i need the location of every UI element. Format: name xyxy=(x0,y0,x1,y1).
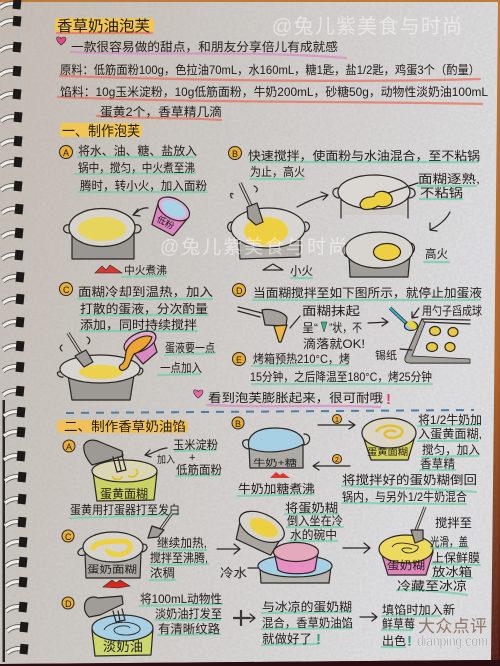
closing note with heart xyxy=(194,390,391,408)
badge E xyxy=(232,352,246,366)
egg note: 一点加入 xyxy=(160,361,202,375)
batter note: ”状，不 xyxy=(329,321,362,335)
top watermark: @兔儿紫美食与时尚 xyxy=(272,15,462,38)
final note xyxy=(382,602,455,650)
added ingredients xyxy=(145,438,222,477)
spoon note: 用勺子舀成球 xyxy=(422,304,482,318)
step C text: 打散的蛋液，分次酌量 xyxy=(80,301,208,316)
cold water label: 冷水 xyxy=(220,566,247,580)
cream bowl: 淡奶油 xyxy=(103,639,143,654)
ingredients: filling xyxy=(58,84,488,104)
milk caption: 牛奶加糖煮沸 xyxy=(238,481,315,496)
batter note: 面糊逐熟, xyxy=(418,171,480,186)
pot with batter xyxy=(64,208,141,259)
panel: filling step B xyxy=(232,412,482,504)
cold bowl note: 水的碗中 xyxy=(290,527,337,542)
spatula with drip xyxy=(238,307,287,342)
right notes: 香草精 xyxy=(420,457,455,471)
heading: section two: 二、制作香草奶油馅 xyxy=(64,419,186,434)
milk pot xyxy=(243,428,310,468)
low flame xyxy=(263,264,283,270)
arrow to pot xyxy=(133,208,148,216)
custard spatula xyxy=(411,507,425,543)
badge E: E xyxy=(236,355,242,365)
title: 香草奶油泡芙 xyxy=(57,18,150,35)
combine note: 与冰凉的蛋奶糊 xyxy=(262,599,352,614)
flame xyxy=(270,472,290,478)
right notes: 入蛋黄面糊, xyxy=(418,426,482,441)
badge D: D xyxy=(236,286,243,296)
added ingredients: + xyxy=(189,452,195,464)
panel: filling step C xyxy=(62,513,265,588)
panel: step D choux xyxy=(232,284,482,363)
chill note: 冷藏至冰凉 xyxy=(397,578,467,593)
arrow to tray xyxy=(368,318,388,326)
arrow to second pot xyxy=(297,192,328,207)
ingredients: choux: 原料：低筋面粉100g，色拉油70mL，水160mL，糖1匙，盐1/2匙，鸡蛋3个（酌量） xyxy=(60,62,480,77)
pot: batter forming xyxy=(333,175,415,218)
chill note: 放冰箱 xyxy=(432,564,472,579)
batter note: 不粘锅 xyxy=(420,185,463,200)
badge C xyxy=(60,282,72,296)
step A text: 腾时，转小火，加入面粉 xyxy=(80,178,207,193)
final note: ! xyxy=(407,633,412,650)
return note xyxy=(342,472,477,504)
badge C: C xyxy=(65,532,72,542)
egg note xyxy=(158,340,215,375)
batter note xyxy=(388,171,480,200)
arrow to cold water bowl xyxy=(217,544,240,554)
custard pot: 蛋奶面糊 xyxy=(87,563,137,576)
dianping watermark: 大众点评 xyxy=(418,617,487,636)
batter note: 面糊抹起 xyxy=(302,303,360,318)
egg note: 蛋液要一点 xyxy=(165,340,215,355)
badge D xyxy=(62,597,74,609)
pot stirring xyxy=(228,183,309,259)
step E text: 烤箱预热210°C，烤 xyxy=(253,351,350,366)
added ingredients: 玉米淀粉 xyxy=(173,438,218,452)
cold bowl note: 将蛋奶糊 xyxy=(285,500,338,515)
panel: step E choux xyxy=(232,351,432,384)
foil label: 锡纸 xyxy=(375,348,397,362)
badge C xyxy=(62,530,74,542)
heating note: 浓稠 xyxy=(150,566,175,580)
heating note: 继续加热, xyxy=(157,536,207,550)
final note: 出色 xyxy=(382,634,406,648)
step B text xyxy=(248,148,480,179)
added ingredients: 加入 xyxy=(157,454,175,466)
badge A: A xyxy=(63,148,69,158)
panel: step C choux xyxy=(57,282,215,400)
heading: section one: 一、制作泡芙 xyxy=(62,123,140,139)
whip note: 淡奶油打发至 xyxy=(155,606,222,621)
batter note: 呈“ xyxy=(302,321,318,335)
step E text xyxy=(250,351,432,384)
arrow 1 xyxy=(318,414,355,429)
hand mixer xyxy=(84,596,125,622)
badge A xyxy=(63,440,75,452)
spoon xyxy=(390,308,418,331)
badge B xyxy=(232,417,244,429)
badge D: D xyxy=(65,599,72,609)
dianping watermark xyxy=(417,617,488,650)
cold bowl note xyxy=(285,500,343,542)
panel: step A choux xyxy=(60,143,207,277)
stirring spatula xyxy=(148,513,172,538)
medium flame xyxy=(95,265,122,273)
cold bowl note: 倒入坐在冷 xyxy=(287,514,343,528)
heating note xyxy=(150,536,208,580)
badge C: C xyxy=(63,285,70,295)
heating note: 搅拌至沸腾, xyxy=(150,550,208,565)
egg yolk bowl xyxy=(92,460,157,501)
whisk caption: 蛋黄用打蛋器打至发白 xyxy=(70,502,180,517)
step B text: 为止，高火 xyxy=(250,164,305,179)
baking tray xyxy=(405,319,470,363)
arrow to final note xyxy=(360,613,377,621)
batter note: 滴落就OK! xyxy=(303,336,365,351)
panel: filling step A xyxy=(63,438,222,518)
custard pot xyxy=(78,532,147,578)
chill note: 光滑，盖 xyxy=(430,535,468,549)
step A text xyxy=(75,143,207,193)
yolk batter bowl xyxy=(362,418,416,460)
badge A xyxy=(60,146,72,158)
arrow 2 xyxy=(313,454,350,470)
batter note xyxy=(290,303,365,351)
intro line with heart: 一款很容易做的甜点，和朋友分享倍儿有成就感 xyxy=(71,39,338,54)
combine note: 就做好了 xyxy=(262,631,312,646)
flour cup: 低粉 xyxy=(155,213,176,231)
arrow to chilled bowl xyxy=(343,543,370,553)
whip note: 将100mL动物性 xyxy=(140,592,222,606)
return note: 锅内，与另外1/2牛奶混合 xyxy=(342,489,467,504)
step A text: 将水、油、糖、盐放入 xyxy=(78,143,197,158)
pot with stirring xyxy=(57,333,143,400)
badge B: B xyxy=(235,419,241,429)
right notes: 搅匀，加入 xyxy=(422,442,480,457)
arrow 2: 2 xyxy=(335,457,339,464)
chill note: 上保鲜膜 xyxy=(432,551,480,565)
badge D xyxy=(232,284,246,296)
return note: 将搅拌好的蛋奶糊倒回 xyxy=(342,472,477,487)
badge B xyxy=(228,146,242,160)
middle watermark: @兔儿紫美食与时尚 xyxy=(160,236,347,258)
ingredients: filling line 2: 蛋黄2个，香草精几滴 xyxy=(100,104,222,119)
section divider xyxy=(66,410,474,413)
tilted pot xyxy=(231,505,289,557)
step C text xyxy=(78,284,213,332)
arrow 1: 1 xyxy=(335,417,339,424)
cream bowl xyxy=(92,615,153,656)
step B text: 快速搅拌，使面粉与水油混合，至不粘锅 xyxy=(248,148,480,163)
flame label: 中火煮沸 xyxy=(124,264,167,277)
pot: batter formed xyxy=(343,232,414,277)
badge A: A xyxy=(66,442,72,452)
arrow to third pot xyxy=(430,212,450,231)
final note: 填馅时加入新 xyxy=(382,602,455,617)
whip note xyxy=(140,592,222,636)
step E text: 15分钟，之后降温至180°C，烤25分钟 xyxy=(250,369,432,384)
combine note: ! xyxy=(316,631,321,648)
bowl in cold water xyxy=(258,542,332,583)
right notes xyxy=(418,412,482,471)
added ingredients: 低筋面粉 xyxy=(176,462,222,477)
high heat label: 高火 xyxy=(425,246,448,261)
closing note with heart: 看到泡芙膨胀起来，很可耐哦 xyxy=(208,391,383,405)
egg cup pouring xyxy=(119,327,159,370)
panel: step B choux xyxy=(228,146,480,278)
custard bowl: 蛋奶糊 xyxy=(387,558,425,572)
badge B: B xyxy=(232,149,238,159)
step D text: 当面糊搅拌至如下图所示，就停止加蛋液 xyxy=(253,285,482,300)
step A text: 锅中，搅匀，中火煮至沸 xyxy=(78,160,195,175)
cold water label xyxy=(220,566,265,580)
custard bowl xyxy=(379,535,433,575)
combine note xyxy=(262,599,353,648)
closing note with heart: ! xyxy=(386,391,391,408)
right notes: 将1/2牛奶加 xyxy=(418,412,482,427)
foil label xyxy=(375,348,412,362)
bottom dark edge xyxy=(0,660,500,666)
flour cup xyxy=(147,192,193,238)
flame xyxy=(103,580,130,588)
chill note: 搅拌至 xyxy=(435,515,472,530)
whip note: 有清晰纹路 xyxy=(158,621,220,636)
low flame label: 小火 xyxy=(290,264,313,278)
combine note: 混合，香草奶油馅 xyxy=(262,615,353,630)
hand mixer xyxy=(84,440,126,472)
spiral binding xyxy=(0,0,28,662)
final note: 鲜草莓 xyxy=(382,617,415,631)
plus and arrow xyxy=(233,610,255,626)
intro line with heart xyxy=(57,37,346,58)
milk pot: 牛奶+糖 xyxy=(253,457,297,468)
chill note xyxy=(397,515,480,595)
step C text: 添加，同时持续搅拌 xyxy=(80,317,197,332)
panel: filling step D xyxy=(62,592,455,656)
yolk batter bowl: 蛋黄面糊 xyxy=(367,446,408,457)
egg yolk bowl: 蛋黄面糊 xyxy=(100,486,148,501)
ingredients: filling: 馅料：10g玉米淀粉，10g低筋面粉，牛奶200mL，砂糖50g，动物性淡奶油100mL xyxy=(60,84,488,99)
step C text: 面糊冷却到温热，加入 xyxy=(78,284,213,299)
